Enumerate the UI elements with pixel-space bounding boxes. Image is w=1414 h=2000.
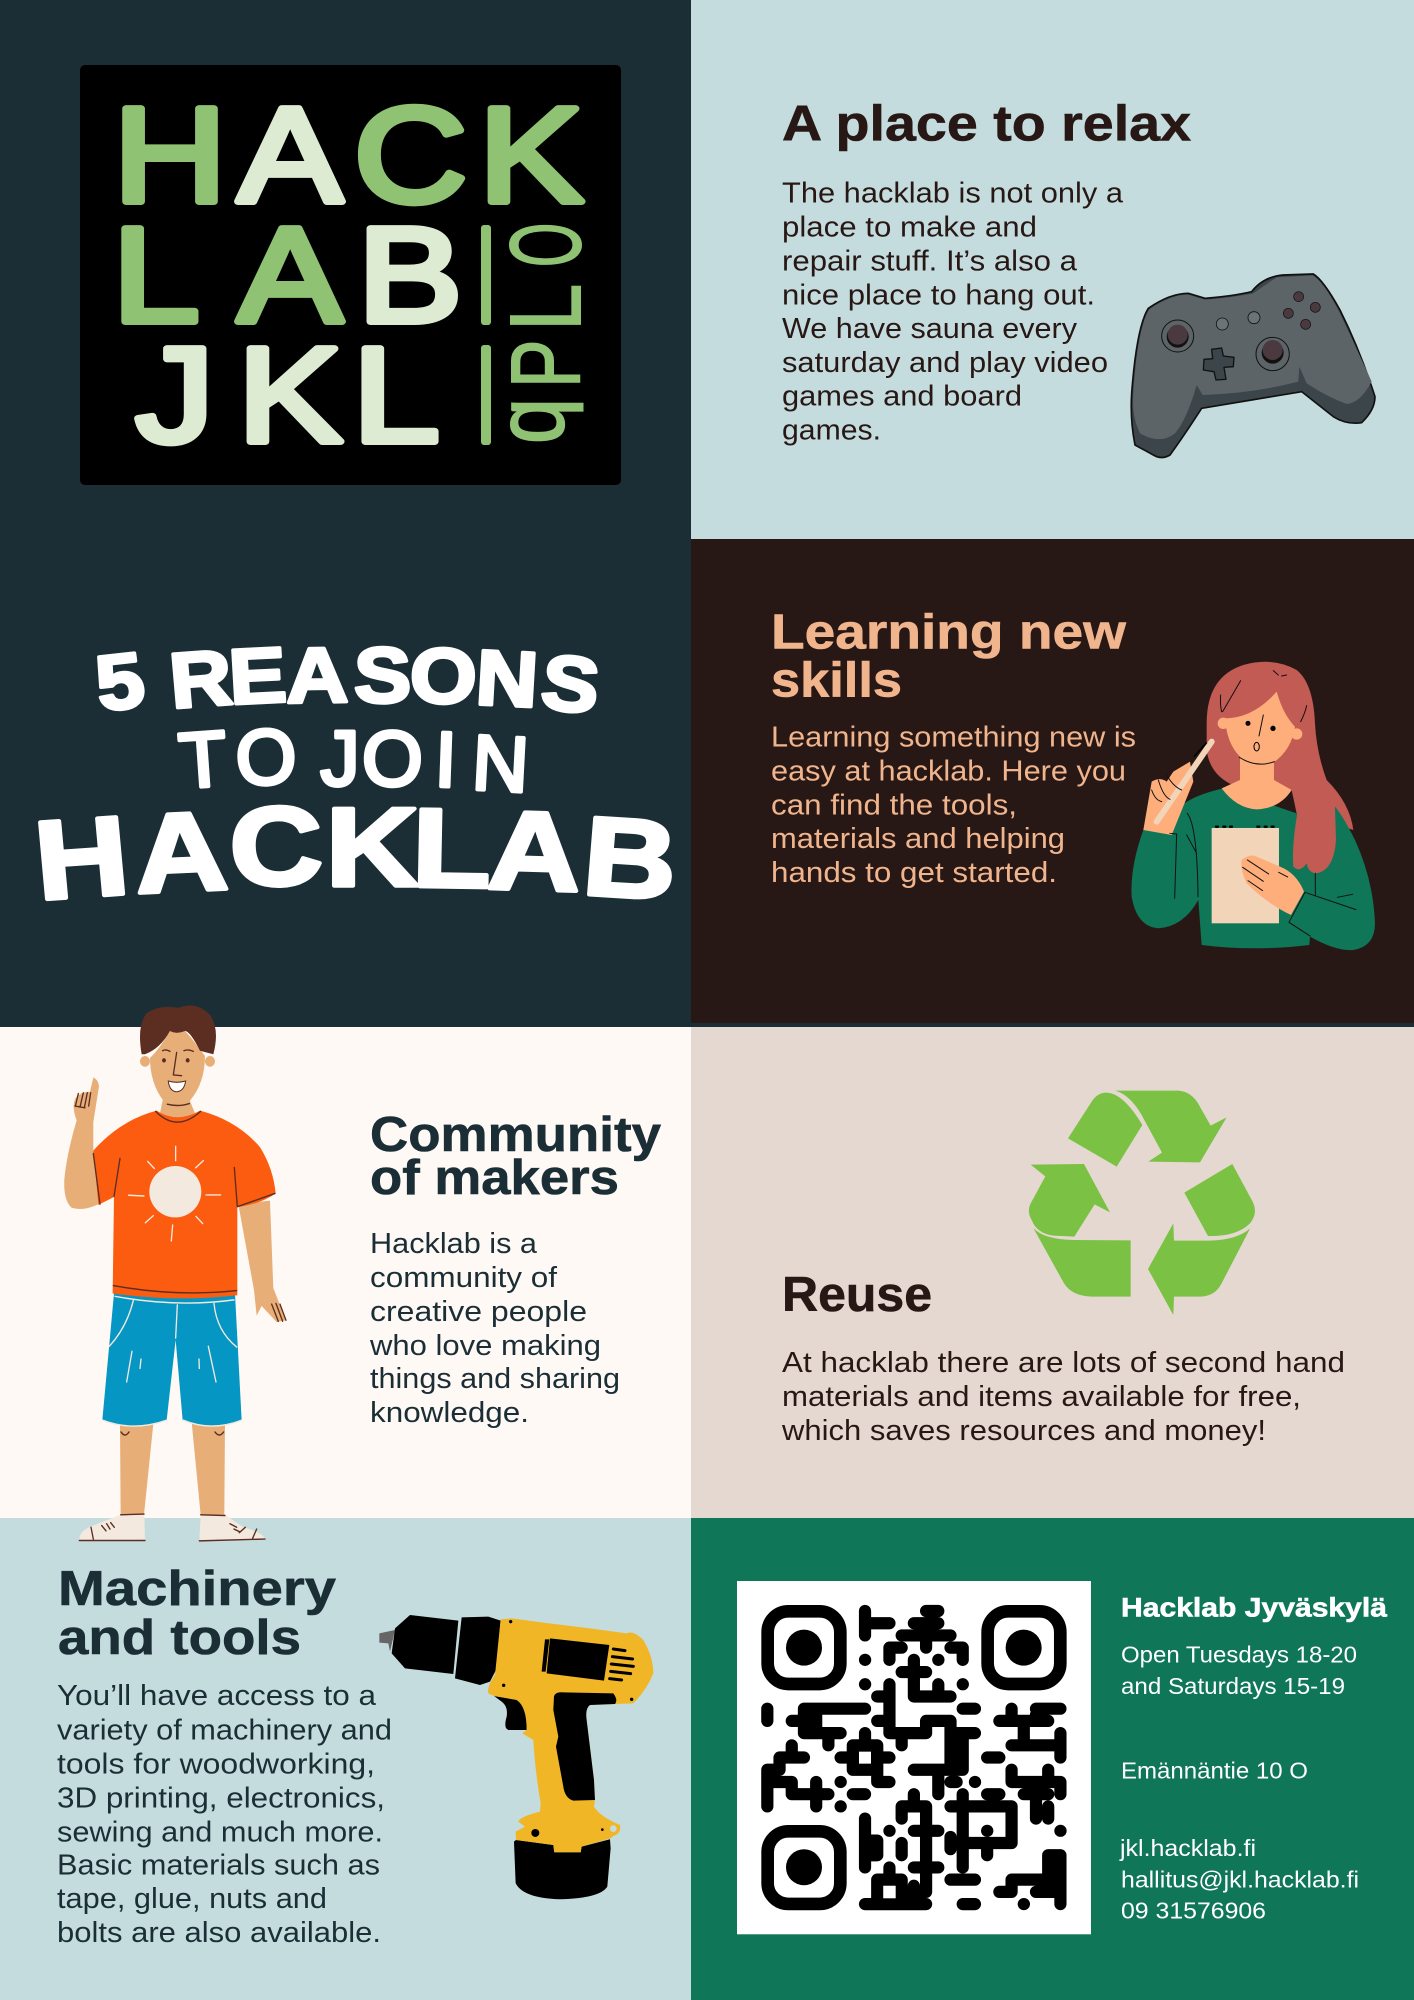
logo: C xyxy=(354,80,467,230)
qr code xyxy=(737,1581,1091,1934)
body text: machinery: variety of machinery and xyxy=(57,1714,392,1746)
body text: relax: repair stuff. It’s also a xyxy=(782,246,1078,278)
heading: community of makers: of makers xyxy=(370,1151,619,1205)
logo: b xyxy=(490,398,598,444)
logo: K xyxy=(238,320,342,470)
icon: recycling symbol xyxy=(1029,1091,1255,1315)
body text: relax: The hacklab is not only a xyxy=(782,178,1124,210)
title xyxy=(30,632,682,924)
panel: machinery and tools xyxy=(0,1518,691,2000)
heading: learning new skills xyxy=(771,605,1127,708)
icon: game controller xyxy=(1131,274,1375,457)
body text: community xyxy=(369,1228,620,1429)
body text: machinery: sewing and much more. xyxy=(57,1816,383,1848)
contact details: 09 31576906 xyxy=(1121,1898,1266,1924)
body text: community: knowledge. xyxy=(370,1397,529,1429)
logo: L xyxy=(113,200,200,350)
heading: a place to relax: A place to relax xyxy=(782,96,1191,152)
title: TO JOIN xyxy=(176,712,531,809)
panel: learning new skills xyxy=(691,539,1414,1027)
logo: H xyxy=(113,80,227,230)
body text: reuse: materials and items available for free, xyxy=(782,1381,1301,1413)
panel: contact and qr code xyxy=(691,1518,1414,2000)
logo: P xyxy=(492,339,600,388)
body text: community: community of xyxy=(370,1262,558,1294)
heading: machinery and tools: and tools xyxy=(58,1611,301,1665)
body text: machinery: tools for woodworking, xyxy=(57,1748,375,1780)
title: 5 REASONS xyxy=(91,632,604,730)
heading: reuse: Reuse xyxy=(782,1268,932,1322)
body text: reuse: which saves resources and money! xyxy=(781,1415,1266,1447)
contact details: jkl.hacklab.fi xyxy=(1119,1835,1256,1861)
logo: A xyxy=(238,200,343,350)
contact details: and Saturdays 15-19 xyxy=(1121,1673,1345,1699)
heading: machinery and tools: Machinery xyxy=(58,1562,336,1616)
body text: reuse: At hacklab there are lots of second hand xyxy=(782,1347,1345,1379)
body text: machinery: You’ll have access to a xyxy=(57,1680,377,1712)
panel: a place to relax xyxy=(691,0,1414,539)
body text: relax: place to make and xyxy=(782,212,1037,244)
body text: relax: We have sauna every xyxy=(782,313,1078,345)
body text: learning: materials and helping xyxy=(771,823,1065,855)
body text: machinery: 3D printing, electronics, xyxy=(57,1782,385,1814)
body text: relax: nice place to hang out. xyxy=(782,280,1095,312)
contact details: Open Tuesdays 18-20 xyxy=(1121,1642,1357,1668)
panel: community of makers xyxy=(0,1027,691,1518)
heading: learning new skills: skills xyxy=(771,654,902,708)
heading: learning new skills: Learning new xyxy=(771,605,1127,659)
body text: learning xyxy=(771,722,1136,889)
logo: B xyxy=(358,200,462,350)
logo: L xyxy=(489,284,602,331)
logo: A xyxy=(238,80,343,230)
body text: relax: games and board xyxy=(782,380,1022,412)
illustration: woman with notepad xyxy=(1131,662,1375,950)
heading: community of makers: Community xyxy=(370,1108,661,1162)
body text: community: things and sharing xyxy=(370,1363,620,1395)
body text: machinery xyxy=(57,1680,392,1949)
contact details: hallitus@jkl.hacklab.fi xyxy=(1121,1866,1359,1892)
body text: relax xyxy=(782,178,1124,446)
body text: machinery: Basic materials such as xyxy=(57,1850,380,1882)
contact details: Emännäntie 10 O xyxy=(1121,1757,1308,1783)
logo: O xyxy=(490,223,602,267)
body text: relax: games. xyxy=(782,414,881,446)
body text: learning: hands to get started. xyxy=(771,857,1057,889)
contact details: Hacklab Jyväskylä xyxy=(1121,1593,1388,1623)
body text: community: creative people xyxy=(370,1296,587,1328)
logo: J xyxy=(136,320,214,470)
logo: L xyxy=(353,320,440,470)
panel: reuse xyxy=(691,1027,1414,1518)
body text: learning: Learning something new is xyxy=(771,722,1136,754)
heading: machinery and tools xyxy=(58,1562,336,1665)
panel: title and logo xyxy=(0,0,691,1027)
body text: community: who love making xyxy=(369,1330,601,1362)
logo xyxy=(80,65,621,485)
body text: learning: can find the tools, xyxy=(771,790,1017,822)
body text: community: Hacklab is a xyxy=(370,1228,538,1260)
illustration: power drill xyxy=(379,1615,653,1899)
contact details xyxy=(1119,1593,1388,1924)
body text: machinery: bolts are also available. xyxy=(57,1917,381,1949)
body text: reuse xyxy=(781,1347,1345,1447)
title: HACKLAB xyxy=(30,783,682,924)
body text: machinery: tape, glue, nuts and xyxy=(57,1883,327,1915)
heading: community of makers xyxy=(370,1108,661,1205)
illustration: man in orange t-shirt xyxy=(64,1005,286,1541)
body text: relax: saturday and play video xyxy=(782,347,1108,379)
body text: learning: easy at hacklab. Here you xyxy=(771,756,1126,788)
logo: K xyxy=(479,80,583,230)
